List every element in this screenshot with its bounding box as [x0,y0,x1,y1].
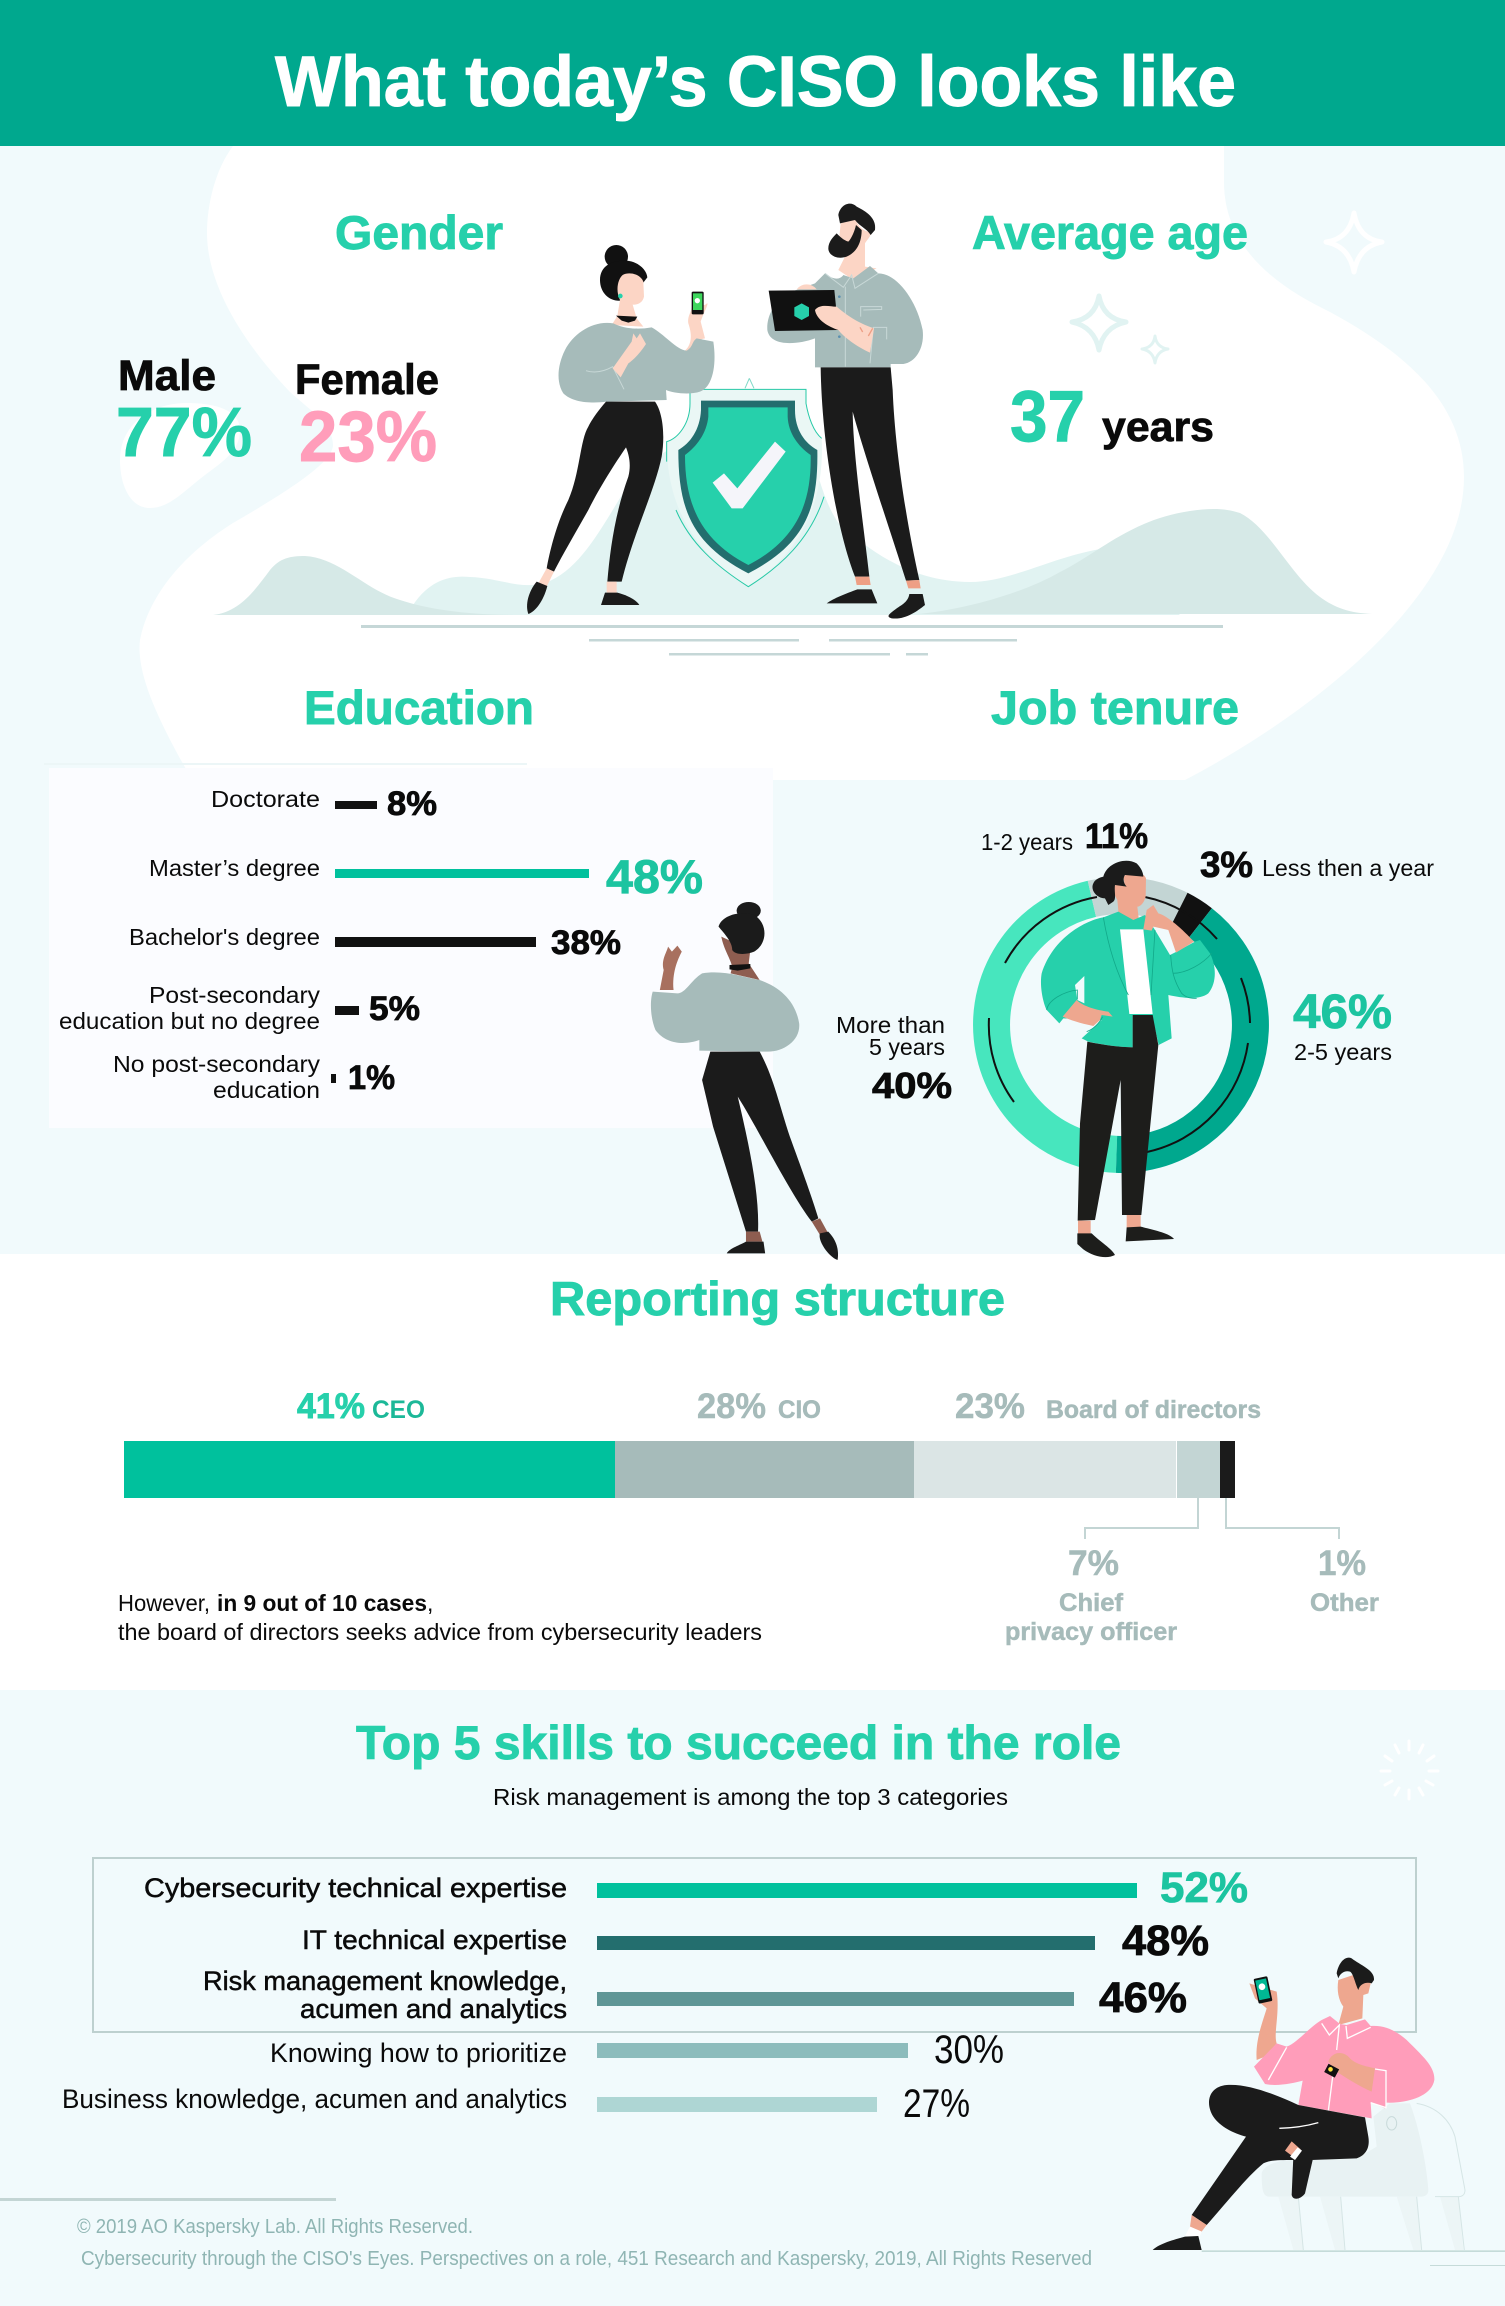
bar row: Bachelor's degree [129,924,621,962]
label: other: Other [1310,1589,1379,1617]
panel: education chart [49,768,773,1128]
heading: Education: Education [304,681,534,734]
skill bar: Knowing how to prioritize: 30% [934,2028,1004,2072]
figure: seated man in pink shirt [1153,1958,1505,2266]
bar row: Master's degree: Master’s degree [149,855,320,881]
ground lines [361,625,1223,656]
skill bar: Cybersecurity technical expertise: 52% [1160,1864,1248,1912]
label: CEO share [297,1387,425,1426]
skill bar: Cybersecurity technical expertise: Cybersecurity technical expertise [144,1873,567,1903]
skill bar: IT technical expertise: IT technical expertise [302,1925,567,1955]
box: top three skills [93,1858,1416,2032]
tenure: 2-5 years: 2-5 years [1294,1039,1392,1065]
label: Board of directors share: Board of directors [1046,1396,1261,1424]
bar row: Master's degree [149,850,703,903]
header banner [0,0,1505,146]
skill bar: Business knowledge: 27% [903,2082,970,2126]
icon: faint sun rays [1381,1741,1438,1799]
label: chief privacy officer: Chief [1059,1589,1124,1617]
skill bar: Knowing how to prioritize [270,2028,1004,2072]
panel: reporting structure background [0,1254,1505,1690]
gender: female: Female [295,356,439,404]
icon: sparkles [1072,213,1382,363]
chart: job tenure ring [989,895,1250,1154]
figure: woman with phone [527,245,715,614]
heading: Top 5 skills: Top 5 skills to succeed in the role [356,1716,1121,1769]
bar row: Doctorate: 8% [387,785,437,823]
figure: person in green jacket [1041,861,1215,1257]
tenure: 2-5 years [1293,986,1392,1065]
label: Board of directors share [955,1387,1261,1426]
subtitle: Risk management is among the top 3 categories [493,1784,1008,1810]
skill bar: IT technical expertise: 48% [1122,1917,1209,1965]
bar row: Post-secondary education but no degree: education but no degree [59,1008,320,1034]
illustration: shield and two people [527,204,925,619]
heading: Reporting structure: Reporting structure [550,1272,1005,1325]
average age value [1010,377,1214,457]
bar row: Master's degree: 48% [606,850,703,903]
label: CEO share: 41% [297,1387,365,1426]
label: chief privacy officer: 7% [1068,1544,1119,1583]
tenure: less than a year: 3% [1200,844,1253,885]
tenure: more than 5 years: 5 years [869,1034,945,1060]
label: other: 1% [1318,1544,1366,1583]
bar row: Bachelor's degree: 38% [551,924,621,962]
tenure: 1-2 years [981,817,1148,856]
header banner: What today’s CISO looks like [275,43,1236,122]
tenure: more than 5 years [836,1012,952,1106]
bar row: Bachelor's degree: Bachelor's degree [129,924,320,950]
skill bar: Business knowledge: Business knowledge, acumen and analytics [62,2084,567,2114]
label: CIO share: 28% [697,1387,766,1426]
skill bar: IT technical expertise [302,1917,1209,1965]
bar row: Doctorate: Doctorate [211,786,320,812]
average age value: years [1102,403,1214,450]
chair [1262,2103,1465,2250]
label: CEO share: CEO [372,1396,425,1424]
skill bar: Cybersecurity technical expertise [144,1864,1248,1912]
figure: woman seen from behind [651,902,838,1260]
mountains backdrop [213,420,1372,615]
average age value: 37 [1010,377,1085,457]
heading: Gender: Gender [335,206,503,259]
bar row: Doctorate [211,785,437,823]
heading: Job tenure: Job tenure [991,681,1239,734]
bar row: Post-secondary education but no degree [59,982,420,1034]
bar row: No post-secondary education: education [213,1077,320,1103]
tenure: less than a year [1200,844,1434,885]
footer: copyright: © 2019 AO Kaspersky Lab. All Rights Reserved. [77,2216,473,2238]
skill bar: Risk management knowledge [203,1966,1187,2024]
bar row: No post-secondary education [113,1051,395,1103]
label: CIO share: CIO [778,1396,821,1424]
figure: man with tablet [767,204,925,619]
tenure: 2-5 years: 46% [1293,986,1392,1039]
tenure: 1-2 years: 11% [1085,817,1148,856]
label: CIO share [697,1387,821,1426]
tenure: more than 5 years: More than [836,1012,945,1038]
bar row: No post-secondary education: 1% [348,1059,395,1097]
skill bar: Business knowledge [62,2082,970,2126]
icon: shield with check mark [667,378,824,587]
label: Board of directors share: 23% [955,1387,1025,1426]
text block: board advice note: the board of directors seeks advice from cybersecurity leaders [118,1619,762,1645]
gender: female: 23% [299,398,437,477]
text block: board advice note: , [427,1590,433,1616]
panel: white background blob [120,146,1464,780]
gender: male: 77% [116,393,252,471]
gender: male [116,352,252,471]
bar row: Post-secondary education but no degree: 5% [369,990,420,1028]
tenure: 1-2 years: 1-2 years [981,829,1073,855]
label: other [1310,1544,1379,1617]
skill bar: Knowing how to prioritize: Knowing how to prioritize [270,2038,567,2068]
text block: board advice note [118,1590,762,1645]
skill bar: Risk management knowledge: Risk management knowledge, [203,1966,567,1996]
skill bar: Risk management knowledge: acumen and analytics [300,1994,567,2024]
label: chief privacy officer: privacy officer [1005,1618,1177,1646]
bar row: No post-secondary education: No post-secondary [113,1051,321,1077]
label: chief privacy officer [1005,1544,1177,1646]
heading: Average age: Average age [972,206,1248,259]
tenure: more than 5 years: 40% [872,1065,952,1106]
text block: board advice note: in 9 out of 10 cases [217,1590,427,1616]
skill bar: Risk management knowledge: 46% [1099,1974,1187,2022]
tenure: less than a year: Less then a year [1262,855,1434,881]
footer: source: Cybersecurity through the CISO's Eyes. Perspectives on a role, 451 Research and Kaspersky, 2019, All Rights Reserved [81,2248,1092,2270]
bar row: Post-secondary education but no degree: Post-secondary [149,982,321,1008]
text block: board advice note: However, [118,1590,210,1616]
gender: male: Male [118,352,216,400]
gender: female [295,356,439,477]
chart: reporting stacked bar [124,1441,1339,1539]
